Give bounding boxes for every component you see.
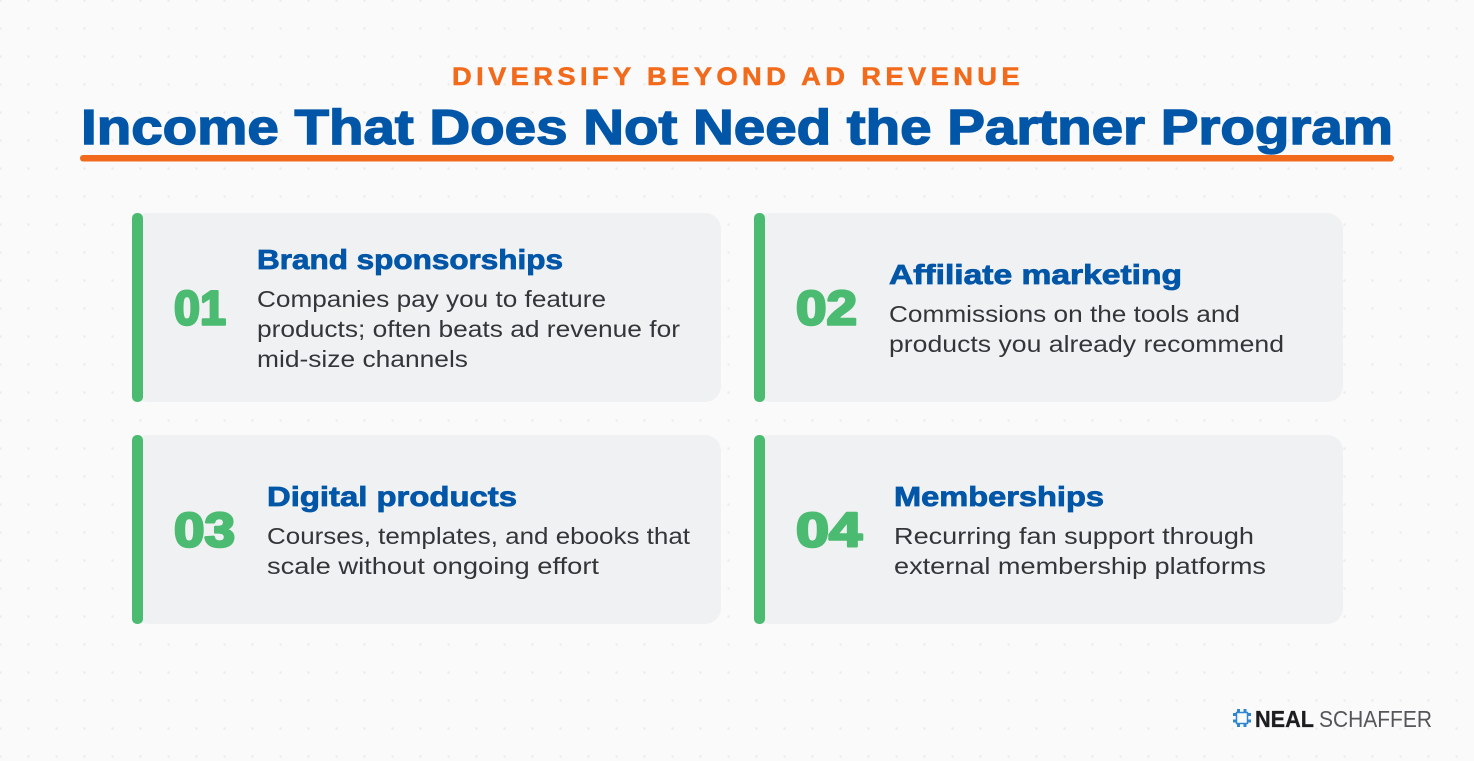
accent bar: [754, 213, 765, 402]
heading: brand sponsorships: Brand sponsorships: [257, 244, 563, 275]
number 02: 02: [796, 282, 857, 336]
number 03: 03: [174, 504, 235, 558]
number 01: 01: [174, 282, 226, 336]
title underline: [80, 155, 1394, 162]
description: mid-size channels: [257, 346, 468, 372]
title: Income That Does Not Need the Partner Program: [81, 101, 1393, 155]
card background: [132, 213, 721, 402]
logo: Neal Schaffer: [1233, 706, 1432, 732]
accent bar: [754, 435, 765, 624]
panel: brand sponsorships: [132, 213, 721, 402]
eyebrow heading: DIVERSIFY BEYOND AD REVENUE: [452, 63, 1024, 91]
card background: [132, 435, 721, 624]
panel: affiliate marketing: [754, 213, 1343, 402]
card background: [754, 435, 1343, 624]
description: Commissions on the tools and: [889, 301, 1240, 327]
description: scale without ongoing effort: [267, 553, 600, 579]
description: Companies pay you to feature: [257, 286, 606, 312]
description: [889, 301, 1284, 357]
description: products you already recommend: [889, 331, 1284, 357]
panel: digital products: [132, 435, 721, 624]
heading: memberships: Memberships: [894, 481, 1104, 512]
wordmark: NEAL: NEAL: [1255, 706, 1314, 732]
icon: chip: [1233, 709, 1251, 727]
description: [267, 523, 691, 579]
description: Courses, templates, and ebooks that: [267, 523, 691, 549]
card background: [754, 213, 1343, 402]
panel: memberships: [754, 435, 1343, 624]
accent bar: [132, 213, 143, 402]
description: [257, 286, 680, 372]
heading: digital products: Digital products: [267, 481, 517, 512]
accent bar: [132, 435, 143, 624]
wordmark: SCHAFFER: SCHAFFER: [1319, 706, 1432, 732]
description: [894, 523, 1266, 579]
number 04: 04: [796, 504, 862, 558]
heading: affiliate marketing: Affiliate marketing: [889, 259, 1182, 290]
description: external membership platforms: [894, 553, 1266, 579]
description: Recurring fan support through: [894, 523, 1254, 549]
description: products; often beats ad revenue for: [257, 316, 680, 342]
